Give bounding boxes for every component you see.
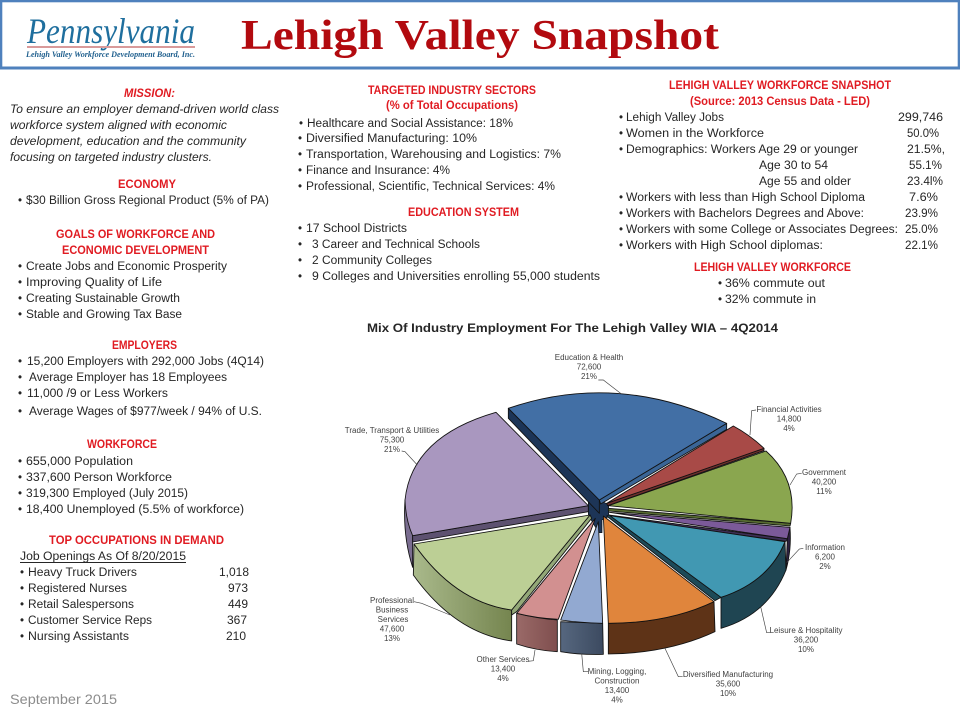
label: education and health: 72,600 [577, 362, 602, 372]
panel: targeted industry sectors: • [298, 133, 302, 145]
panel: workforce snapshot: Workers with some College or Associates Degrees: [626, 224, 898, 236]
panel: goals: Create Jobs and Economic Prosperity [26, 261, 227, 273]
slice: information [608, 512, 790, 570]
panel: workforce snapshot: • [619, 128, 623, 140]
panel: employers [18, 340, 264, 418]
label: information: Information [805, 543, 845, 552]
label: leisure and hospitality: 36,200 [794, 636, 819, 644]
panel: employers: Average Wages of $977/week / 94% of U.S. [29, 406, 262, 418]
panel: workforce snapshot: • [619, 112, 623, 124]
panel: top occupations in demand: Heavy Truck Drivers [28, 567, 137, 579]
panel: mission: focusing on targeted industry clusters. [10, 152, 212, 164]
panel: top occupations in demand: • [20, 615, 24, 627]
label: other services: Other Services [477, 655, 529, 664]
label: professional business services: Business [376, 606, 408, 614]
panel: commute: LEHIGH VALLEY WORKFORCE [694, 262, 851, 274]
leader lines [402, 380, 803, 677]
panel: targeted industry sectors: (% of Total Occupations) [386, 100, 518, 112]
panel: workforce: 18,400 Unemployed (5.5% of workforce) [26, 504, 244, 516]
panel: commute: • [718, 294, 722, 306]
panel: workforce: • [18, 472, 22, 484]
panel: goals: • [18, 293, 22, 305]
label: diversified manufacturing: Diversified Manufacturing [683, 670, 773, 679]
logo: Pennsylvania: Lehigh Valley Workforce Development Board, Inc. [25, 49, 195, 59]
panel: workforce snapshot: Demographics: Workers Age 29 or younger [626, 144, 858, 156]
label: professional business services: 47,600 [380, 624, 405, 634]
pie chart [345, 353, 847, 704]
panel: goals: Stable and Growing Tax Base [26, 309, 182, 321]
panel: workforce snapshot: • [619, 192, 623, 204]
panel: workforce snapshot: • [619, 240, 623, 252]
panel: mission: MISSION: [124, 88, 175, 100]
chart title: Mix Of Industry Employment For The Lehigh Valley WIA – 4Q2014 [367, 321, 778, 335]
header banner [0, 1, 960, 70]
label: information: 6,200 [815, 552, 836, 562]
slice: trade, transport and utilities [405, 412, 588, 567]
panel: workforce snapshot: 25.0% [905, 224, 938, 236]
panel: workforce: • [18, 504, 22, 516]
panel: mission [10, 88, 279, 164]
panel: education system: EDUCATION SYSTEM [408, 207, 519, 219]
panel: top occupations in demand: Job Openings As Of 8/20/2015 [20, 551, 186, 563]
panel: targeted industry sectors: Professional, Scientific, Technical Services: 4% [306, 181, 555, 193]
panel: goals: Creating Sustainable Growth [26, 293, 180, 305]
panel: education system: • [298, 271, 302, 283]
panel: commute: • [718, 278, 722, 290]
panel: workforce snapshot: 7.6% [909, 192, 938, 204]
label: other services: 13,400 [491, 664, 516, 674]
panel: commute: 32% commute in [725, 294, 816, 306]
date footer: September 2015 [10, 691, 117, 707]
slice: diversified manufacturing [603, 516, 715, 654]
panel: education system: 9 Colleges and Universities enrolling 55,000 students [312, 271, 600, 283]
panel: workforce snapshot: LEHIGH VALLEY WORKFORCE SNAPSHOT [669, 80, 891, 92]
panel: workforce snapshot: Age 30 to 54 [759, 160, 829, 172]
panel: commute [694, 262, 851, 306]
panel: top occupations in demand: 973 [228, 583, 248, 595]
panel: employers: • [18, 406, 22, 418]
label: trade, transport and utilities: 75,300 [380, 436, 405, 444]
label: financial activities: 14,800 [777, 414, 802, 424]
pie slices [402, 380, 803, 677]
label: other services: 4% [497, 674, 509, 683]
slice: mining, logging, construction [561, 522, 603, 654]
label: leisure and hospitality: 10% [798, 645, 814, 654]
panel: employers: • [18, 356, 22, 368]
panel: employers: 15,200 Employers with 292,000 Jobs (4Q14) [27, 356, 264, 368]
panel: workforce snapshot: • [619, 224, 623, 236]
panel: workforce snapshot: 50.0% [907, 128, 939, 140]
slice: professional business services [413, 515, 592, 641]
panel: employers: 11,000 /9 or Less Workers [27, 388, 168, 400]
label: professional business services: Services [378, 615, 408, 624]
panel: economy: ECONOMY [118, 179, 176, 191]
panel: goals: Improving Quality of Life [26, 277, 162, 289]
panel: workforce: • [18, 488, 22, 500]
panel: economy [18, 179, 269, 207]
logo: Pennsylvania: Pennsylvania [26, 11, 195, 51]
panel: education system: 17 School Districts [306, 223, 407, 235]
panel: workforce snapshot: 23.9% [905, 208, 938, 220]
pie centre block [588, 497, 609, 547]
panel: top occupations in demand: • [20, 599, 24, 611]
label: education and health: 21% [581, 372, 597, 381]
title: Lehigh Valley Snapshot [241, 13, 719, 59]
panel: workforce snapshot: 299,746 [898, 112, 943, 124]
panel: workforce snapshot: (Source: 2013 Census Data - LED) [690, 96, 870, 108]
panel: workforce snapshot: Lehigh Valley Jobs [626, 112, 724, 124]
panel: education system: • [298, 239, 302, 251]
label: government: Government [802, 468, 846, 477]
panel: workforce snapshot: 23.4l% [907, 176, 943, 188]
panel: workforce snapshot: • [619, 144, 623, 156]
label: trade, transport and utilities: Trade, Transport & Utilities [345, 426, 439, 435]
panel: workforce snapshot [619, 80, 945, 252]
panel: workforce snapshot: • [619, 208, 623, 220]
panel: top occupations in demand: 449 [228, 599, 248, 611]
panel: workforce: • [18, 456, 22, 468]
panel: workforce snapshot: Women in the Workforce [626, 128, 764, 140]
panel: targeted industry sectors: • [298, 149, 302, 161]
panel: workforce snapshot: Workers with less than High School Diploma [626, 192, 866, 204]
label: government: 11% [816, 487, 832, 496]
panel: workforce: WORKFORCE [87, 439, 157, 451]
label: mining, logging, construction: 13,400 [605, 686, 630, 695]
panel: employers: Average Employer has 18 Employees [29, 372, 227, 384]
label: mining, logging, construction: 4% [611, 696, 623, 704]
panel: workforce snapshot: Workers with Bachelors Degrees and Above: [626, 208, 864, 220]
panel: mission: To ensure an employer demand-driven world class [10, 104, 279, 116]
panel: workforce [18, 439, 244, 516]
panel: top occupations in demand: Customer Service Reps [28, 615, 152, 627]
panel: top occupations in demand: 210 [226, 631, 246, 643]
panel: workforce snapshot: Workers with High School diplomas: [626, 240, 823, 252]
slice: financial activities [607, 426, 764, 506]
panel: top occupations in demand: • [20, 567, 24, 579]
panel: targeted industry sectors: • [298, 181, 302, 193]
slice: education and health [508, 393, 727, 513]
panel: top occupations in demand: Nursing Assistants [28, 631, 129, 643]
label: mining, logging, construction: Construction [595, 676, 639, 686]
label: professional business services: 13% [384, 634, 400, 643]
slice: government [608, 451, 792, 526]
panel: top occupations in demand: Registered Nurses [28, 583, 127, 595]
panel: education system [298, 207, 600, 283]
panel: goals [18, 229, 227, 321]
panel: top occupations in demand: 367 [227, 615, 247, 627]
panel: goals: ECONOMIC DEVELOPMENT [62, 245, 209, 257]
panel: employers: EMPLOYERS [112, 340, 177, 352]
slice: other services [517, 518, 595, 652]
panel: economy: • [18, 195, 22, 207]
label: information: 2% [819, 562, 831, 571]
panel: top occupations in demand: 1,018 [219, 567, 249, 579]
label: trade, transport and utilities: 21% [384, 445, 400, 454]
panel: commute: 36% commute out [725, 278, 826, 290]
panel: targeted industry sectors: Finance and Insurance: 4% [306, 165, 450, 177]
label: diversified manufacturing: 35,600 [716, 680, 741, 688]
panel: targeted industry sectors [298, 85, 561, 193]
panel: top occupations in demand: TOP OCCUPATIONS IN DEMAND [49, 535, 224, 547]
label: professional business services: Professional [370, 596, 414, 605]
panel: targeted industry sectors: TARGETED INDUSTRY SECTORS [368, 85, 536, 97]
panel: targeted industry sectors: Transportation, Warehousing and Logistics: 7% [306, 149, 561, 161]
panel: goals: • [18, 261, 22, 273]
label: government: 40,200 [812, 478, 837, 486]
panel: top occupations in demand: • [20, 583, 24, 595]
panel: workforce snapshot: Age 55 and older [759, 176, 851, 188]
panel: workforce snapshot: 55.1% [909, 160, 942, 172]
panel: education system: 2 Community Colleges [312, 255, 432, 267]
panel: top occupations in demand: • [20, 631, 24, 643]
panel: education system: 3 Career and Technical Schools [312, 239, 480, 251]
panel: top occupations in demand: Retail Salespersons [28, 599, 134, 611]
panel: mission: workforce system aligned with economic [10, 120, 227, 132]
pie labels [345, 353, 847, 704]
label: education and health: Education & Health [555, 353, 623, 362]
label: financial activities: 4% [783, 424, 795, 433]
panel: goals: • [18, 309, 22, 321]
panel: mission: development, education and the community [10, 136, 247, 148]
label: diversified manufacturing: 10% [720, 689, 736, 698]
panel: employers: • [18, 372, 22, 384]
label: mining, logging, construction: Mining, Logging, [588, 667, 646, 676]
panel: workforce: 337,600 Person Workforce [26, 472, 172, 484]
panel: targeted industry sectors: • [299, 118, 303, 130]
panel: economy: $30 Billion Gross Regional Product (5% of PA) [26, 195, 269, 207]
panel: goals: • [18, 277, 22, 289]
panel: targeted industry sectors: • [298, 165, 302, 177]
panel: targeted industry sectors: Healthcare and Social Assistance: 18% [307, 118, 513, 130]
panel: education system: • [298, 223, 302, 235]
panel: targeted industry sectors: Diversified Manufacturing: 10% [306, 133, 477, 145]
panel: workforce: 319,300 Employed (July 2015) [26, 488, 188, 500]
panel: top occupations in demand [20, 535, 249, 643]
label: leisure and hospitality: Leisure & Hospitality [770, 626, 842, 635]
panel: workforce snapshot: 22.1% [905, 240, 938, 252]
panel: education system: • [298, 255, 302, 267]
panel: employers: • [18, 388, 22, 400]
panel: workforce: 655,000 Population [26, 456, 133, 468]
panel: workforce snapshot: 21.5%, [907, 144, 945, 156]
panel: goals: GOALS OF WORKFORCE AND [56, 229, 215, 241]
slice: leisure and hospitality [607, 515, 786, 628]
label: financial activities: Financial Activities [756, 405, 822, 414]
